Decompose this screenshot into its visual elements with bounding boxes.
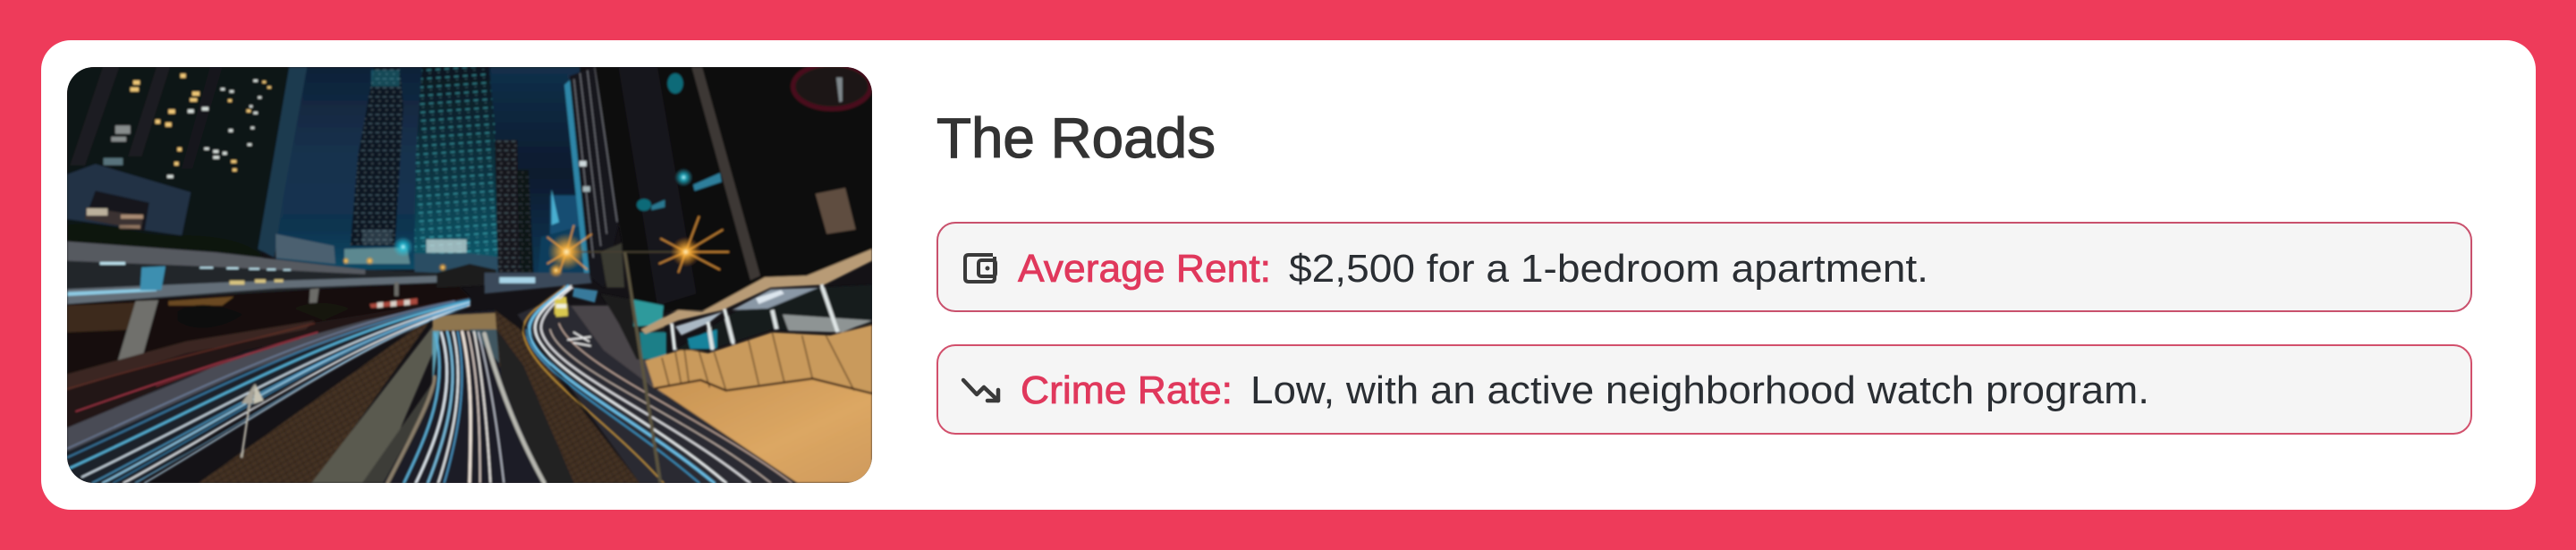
sky — [275, 67, 490, 270]
light trails: left highway — [67, 300, 470, 483]
right retaining wall — [495, 310, 640, 483]
label: crime rate: Crime Rate: — [1021, 368, 1233, 412]
distant bridge — [485, 273, 592, 293]
photo: city roads at night with light trails — [67, 64, 872, 483]
stair parapet — [646, 325, 872, 393]
trees — [67, 224, 264, 261]
light trails: tunnel — [387, 332, 544, 483]
tail lights on left road — [76, 333, 318, 411]
lower stair slope — [648, 378, 872, 483]
road surfaces — [67, 297, 470, 429]
warning sign — [242, 384, 264, 458]
pedestrian bridge — [67, 241, 496, 360]
icon: wallet — [965, 255, 996, 282]
value: average rent: $2,500 for a 1-bedroom apartment. — [1289, 247, 1928, 291]
distant towers — [495, 140, 589, 273]
tower two — [413, 67, 499, 274]
street lamp — [343, 216, 729, 483]
icon: trending down arrow — [963, 380, 998, 401]
info row: crime rate — [937, 345, 2471, 434]
under-bridge ground — [67, 282, 470, 376]
low building behind bridge — [275, 234, 335, 264]
canopy and railing — [641, 249, 872, 351]
left building — [67, 67, 307, 258]
lit windows — [131, 73, 271, 172]
right dark building — [595, 64, 872, 311]
distant storefronts — [572, 288, 597, 302]
tower one — [351, 67, 403, 246]
label: average rent: Average Rent: — [1018, 247, 1271, 291]
right lit building — [564, 67, 624, 288]
tunnel — [383, 310, 550, 483]
light trails: right road — [523, 286, 792, 483]
title: The Roads — [936, 107, 1216, 170]
info row: average rent — [937, 223, 2471, 311]
right road — [517, 297, 798, 483]
value: crime rate: Low, with an active neighborhood watch program. — [1250, 368, 2149, 412]
